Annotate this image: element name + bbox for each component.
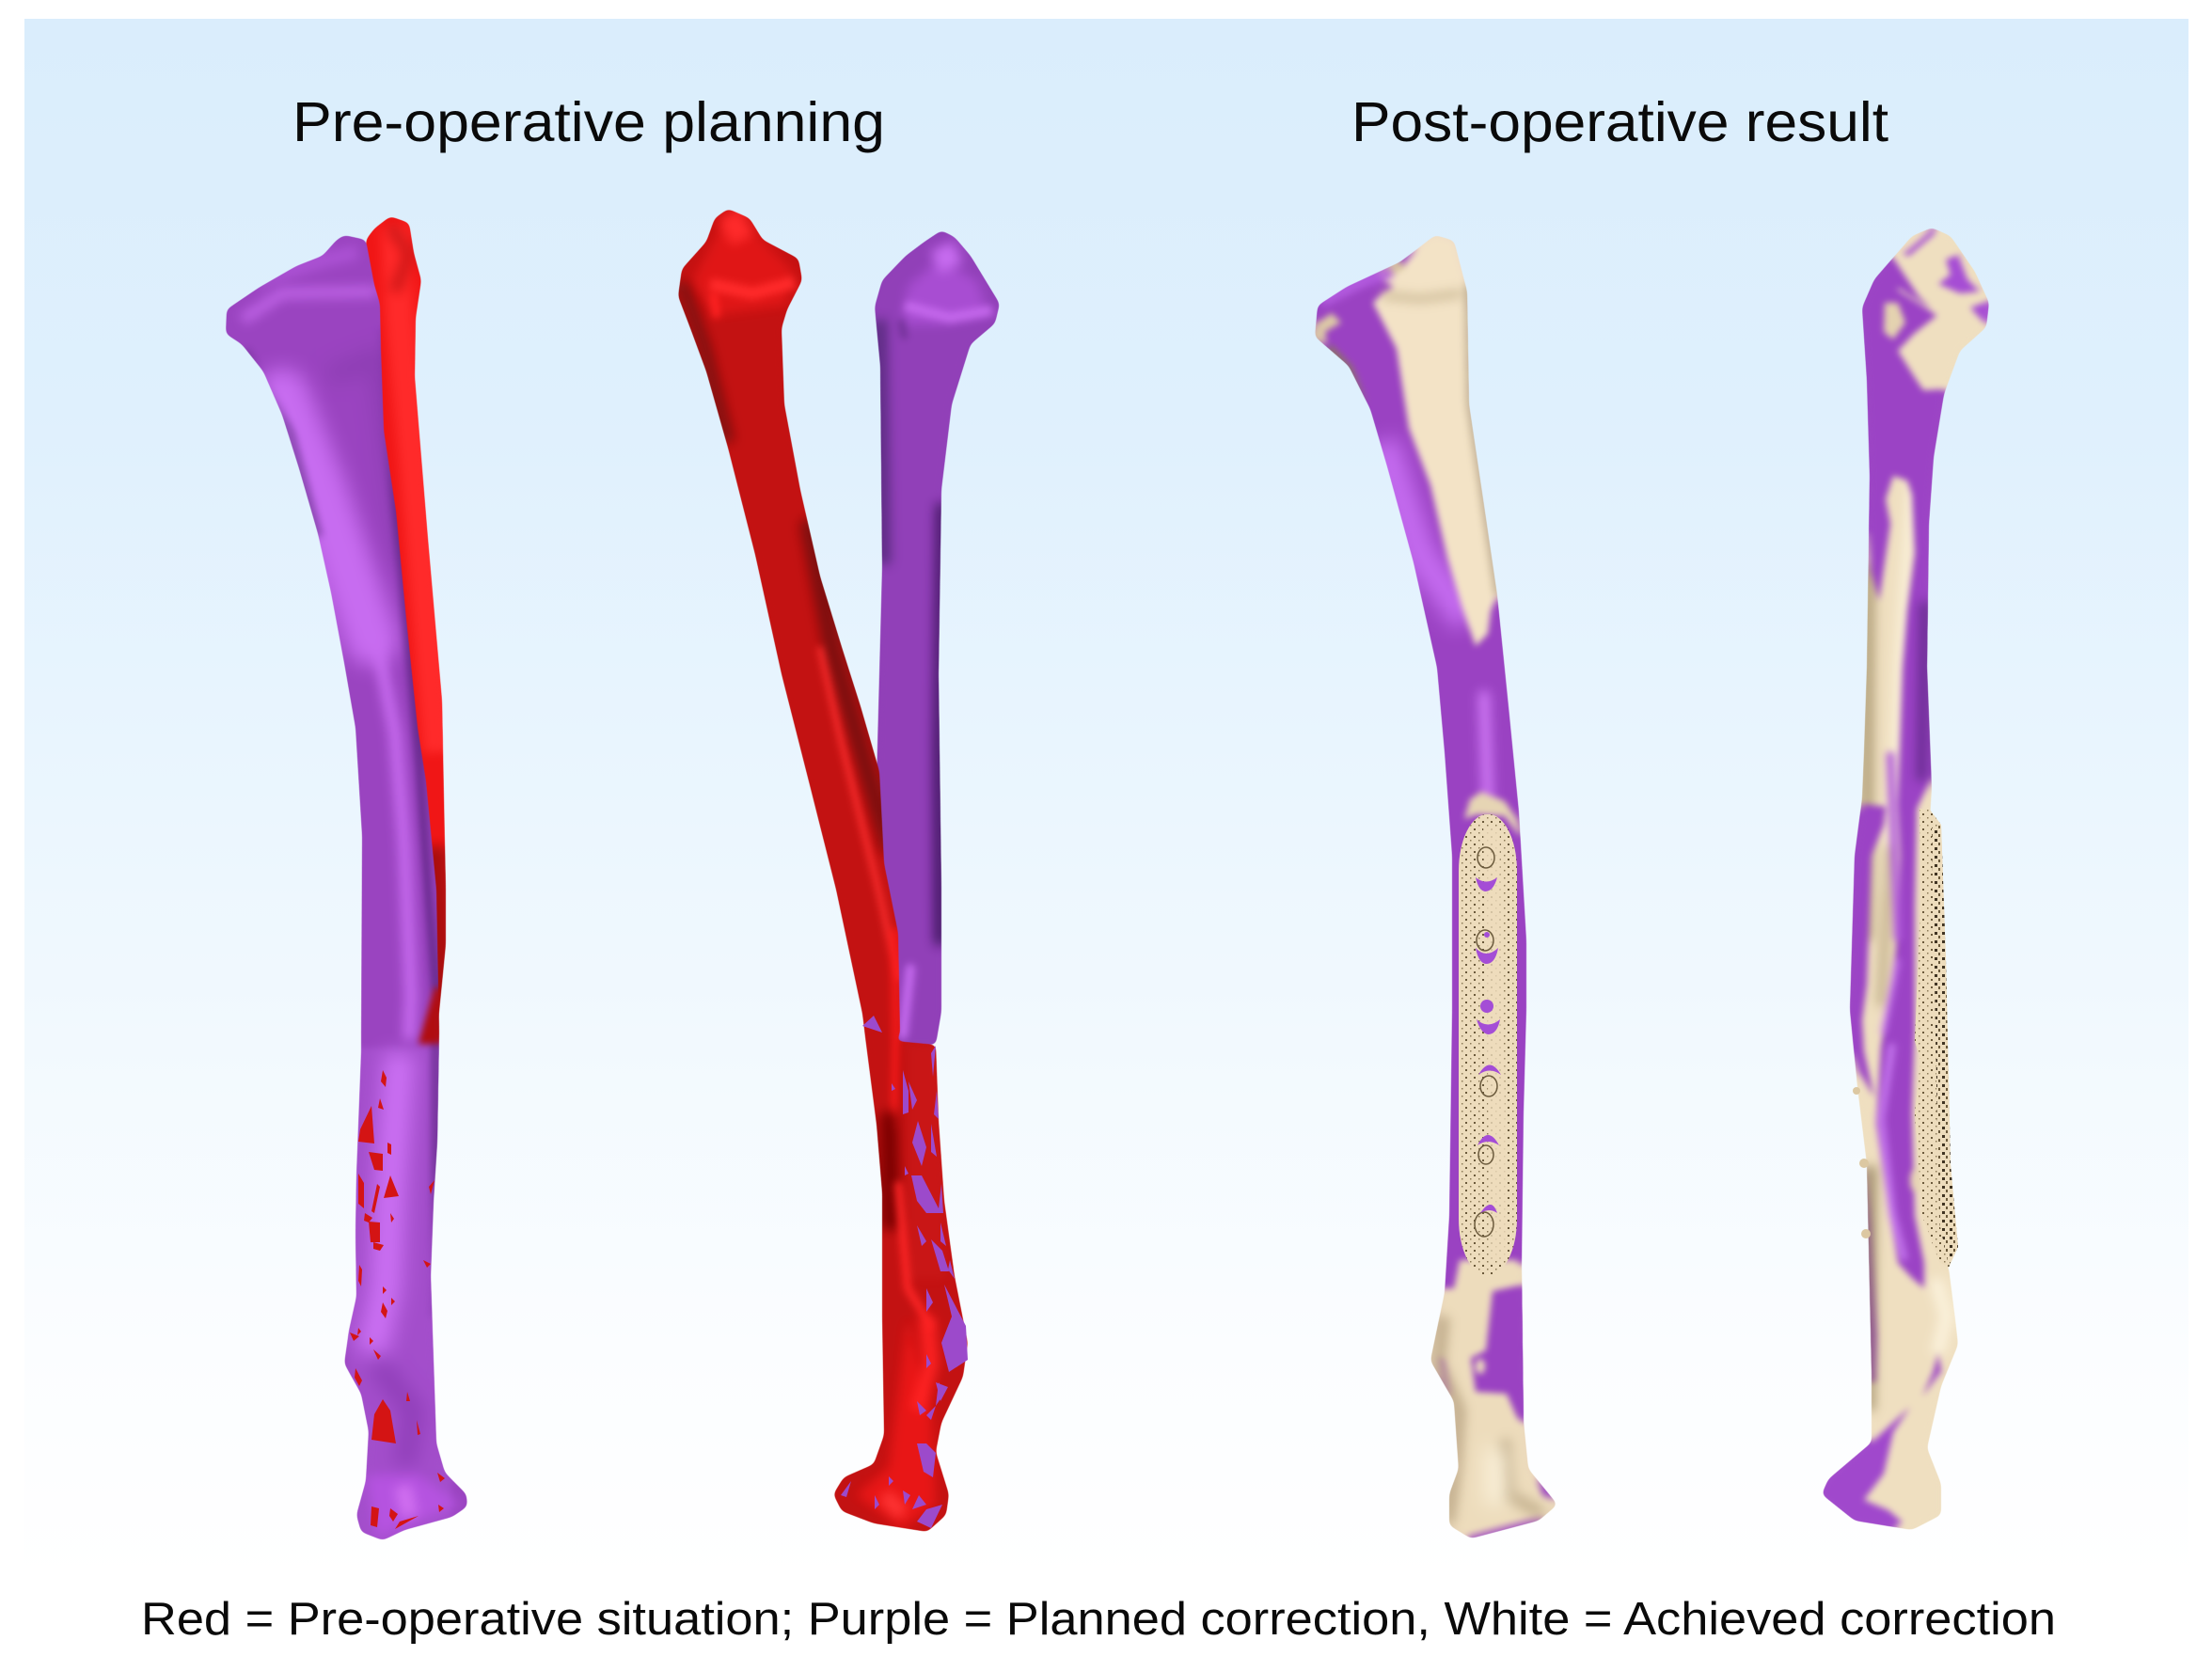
cream cap above plate (1464, 792, 1520, 837)
plate dark surface texture (1932, 825, 1958, 1266)
bone: red pre-operative situation, side view (678, 209, 968, 1532)
bone pair: pre-operative side view (678, 209, 1000, 1532)
bone: achieved and planned correction overlay, side view with plate (1815, 228, 1989, 1533)
small surface fragments (1853, 1087, 1871, 1238)
purple patches on lower shaft (841, 1016, 968, 1528)
surgical plate (1459, 814, 1517, 1275)
caption: colour legend: Red = Pre-operative situation; Purple = Planned correction, White = Achieved correction (141, 1594, 2056, 1645)
heading: pre-operative planning: Pre-operative planning (292, 91, 885, 153)
bone: purple planned correction, side view (875, 230, 1000, 1045)
red patches on lower shaft (350, 1070, 445, 1529)
bone: achieved and planned correction overlay, front view with plate (1315, 235, 1561, 1561)
purple screw-hole crescents (1476, 877, 1501, 1213)
bone pair: pre-operative front view (226, 216, 467, 1555)
cream lower end (1431, 1255, 1556, 1538)
heading: post-operative result: Post-operative result (1351, 91, 1888, 153)
surgical plate, side view (1915, 809, 1958, 1268)
bone: red pre-operative situation, front view (366, 216, 446, 1049)
purple planned regions, upper and central (1862, 255, 1947, 1290)
cream achieved regions, upper (1373, 235, 1497, 646)
bone: purple planned correction, front view (226, 235, 467, 1555)
